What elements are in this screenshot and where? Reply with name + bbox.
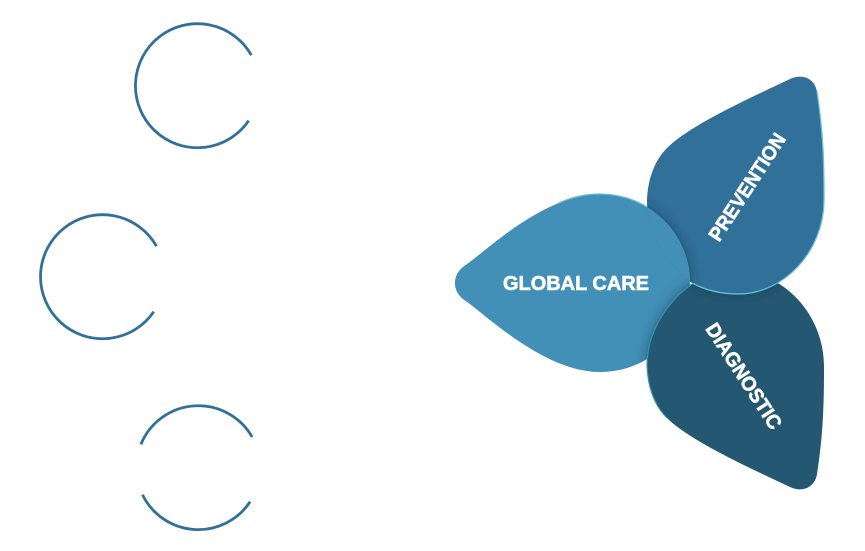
label: prevention: PREVENTION [705, 130, 791, 246]
petal diagram [455, 77, 824, 489]
petal: diagnostic [646, 283, 824, 490]
label: global care: GLOBAL CARE [503, 273, 649, 295]
circle outline: top [135, 24, 251, 148]
circle outline: middle [41, 215, 156, 339]
label: diagnostic: DIAGNOSTIC [701, 319, 786, 434]
petal: prevention [647, 76, 825, 295]
circle outline: bottom [141, 406, 252, 530]
petal: global care [455, 193, 690, 372]
